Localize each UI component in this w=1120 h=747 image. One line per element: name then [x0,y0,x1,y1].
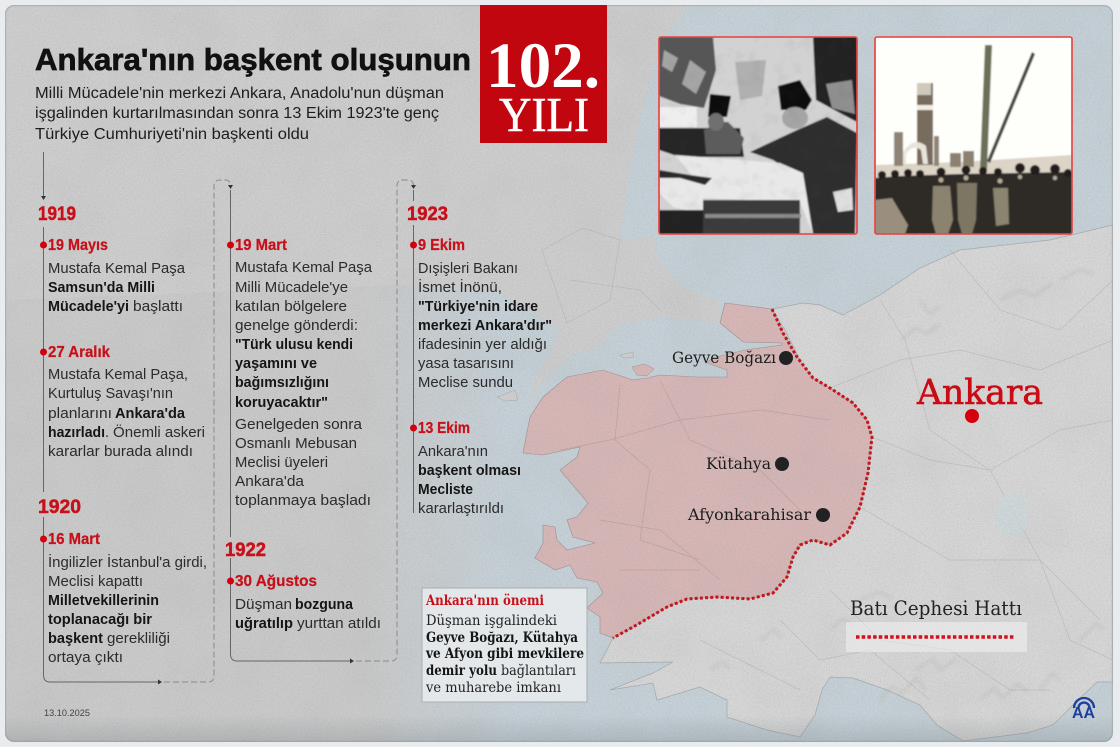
year 1920: 1920 [38,496,81,518]
callout: Ankara'nın önemi: Ankara'nın önemi [425,593,544,609]
intro text: Türkiye Cumhuriyeti'nin başkenti oldu [35,126,309,143]
timeline connector 2 [230,180,416,664]
badge: 102. yılı: YILI [499,87,589,142]
event: 27 Aralık: planlarını [48,406,112,422]
timeline connector 1 [41,152,233,684]
callout: Ankara'nın önemi: ve muharebe imkanı [425,680,561,696]
event: 19 Mart: "Türk ulusu kendi [235,337,353,353]
event: 19 Mayıs: Samsun'da Milli [48,280,155,296]
city: Geyve Boğazı: Geyve Boğazı [672,348,776,367]
event: 13 Ekim: başkent olması [418,463,521,479]
land: Balkans and Thrace [477,6,720,402]
event: 13 Ekim: Mecliste [418,482,473,498]
land: Aegean islands [497,352,634,401]
crowd heads [878,163,1072,179]
event: 19 Mart: 19 Mart [235,237,287,254]
event: 16 Mart 1920: İngilizler İstanbul'a girdi, [48,553,207,571]
badge: 102. yılı [480,5,607,143]
event: 27 Aralık [40,344,205,460]
event: 13 Ekim: 13 Ekim [418,420,470,437]
date stamp: 13.10.2025 [44,708,90,719]
event: 9 Ekim: 9 Ekim [418,237,465,254]
event: 9 Ekim: Meclise sundu [418,375,513,391]
event: 13 Ekim: Ankara'nın [418,444,488,460]
occupied region inner lines [560,380,830,580]
callout: Ankara'nın önemi: Düşman işgalindeki [426,613,557,629]
lake [1004,496,1024,530]
occupied region [523,303,872,638]
event: 9 Ekim: "Türkiye'nin idare [418,299,538,315]
callout: Ankara'nın önemi: demir yolu [426,663,497,679]
intro text [35,85,444,143]
event: 19 Mayıs [40,237,186,315]
event: 19 Mart: Genelgeden sonra [235,417,363,433]
callout: Ankara'nın önemi: Geyve Boğazı, Kütahya [426,630,578,646]
legend: Batı Cephesi Hattı: Batı Cephesi Hattı [850,596,1022,620]
event: 19 Mart: Meclisi üyeleri [235,455,328,471]
event: 16 Mart 1920: başkent [48,631,103,647]
event: 27 Aralık: Kurtuluş Savaşı'nın [48,386,173,402]
event: 16 Mart 1920 [40,531,207,666]
event: 19 Mart: genelge gönderdi: [235,318,358,334]
photo: Atatürk at the table [659,37,857,234]
event: 9 Ekim: yasa tasarısını [418,356,514,372]
event: 19 Mart: bağımsızlığını [235,375,329,391]
event: 19 Mart [227,237,373,509]
event: 16 Mart 1920: toplanacağı bir [48,612,152,628]
title: Ankara'nın başkent oluşunun [35,42,471,77]
event: 30 Ağustos: 30 Ağustos [235,573,317,590]
city: Ankara: Ankara [916,373,1043,413]
year 1919: 1919 [38,203,76,225]
photo: crowd and minarets [875,37,1072,234]
event: 16 Mart 1920: ortaya çıktı [48,650,123,666]
event: 27 Aralık: Ankara'da [115,406,186,422]
event: 30 Ağustos: uğratılıp [235,616,293,632]
event: 9 Ekim: İsmet İnönü, [418,278,502,296]
event: 19 Mayıs: başlattı [133,299,183,315]
event: 19 Mart: Osmanlı Mebusan [235,436,357,452]
city: Afyonkarahisar: Afyonkarahisar [687,505,811,524]
city: Kütahya: Kütahya [706,454,771,473]
event: 27 Aralık: 27 Aralık [48,344,110,361]
event: 19 Mart: koruyacaktır" [235,395,328,411]
icon: AA logo [1072,698,1095,722]
event: 19 Mayıs: Mustafa Kemal Paşa [48,261,186,277]
event: 9 Ekim [410,237,552,391]
event: 27 Aralık: Önemli askeri [113,423,205,441]
event: 19 Mayıs: Mücadele'yi [48,299,129,315]
event: 9 Ekim: Dışişleri Bakanı [418,261,518,277]
event: 19 Mart: yaşamını ve [235,356,317,372]
event: 30 Ağustos: yurttan atıldı [297,616,381,632]
event: 30 Ağustos: bozguna [295,597,354,613]
event: 16 Mart 1920: Milletvekillerinin [48,593,159,609]
event: 19 Mart: katılan bölgelere [235,299,347,315]
icon: AA logo: AA [1072,705,1095,722]
event: 19 Mayıs: 19 Mayıs [48,237,108,254]
callout: Ankara'nın önemi: ve Afyon gibi mevkilere [425,646,584,662]
map: relief shading [710,270,1104,700]
Kapıdağ peninsula [632,364,654,376]
event: 30 Ağustos: Düşman [235,597,292,613]
event: 30 Ağustos [227,573,381,632]
intro text: Milli Mücadele'nin merkezi Ankara, Anadolu'nun düşman [35,85,444,102]
event: 19 Mart: Milli Mücadele'ye [235,280,348,296]
event: 16 Mart 1920: Meclisi kapattı [48,574,143,590]
land: Anatolia [600,225,1113,741]
event: 27 Aralık: kararlar burada alındı [48,444,193,460]
event: 27 Aralık: Mustafa Kemal Paşa, [48,367,188,383]
event: 9 Ekim: ifadesinin yer aldığı [418,337,547,353]
intro text: işgalinden kurtarılmasından sonra 13 Ekim 1923'te genç [35,105,439,122]
event: 13 Ekim: kararlaştırıldı [418,501,504,517]
timeline connector 3 [412,190,414,513]
event: 27 Aralık: . [105,425,109,441]
badge: 102. yılı: 102. [486,30,600,102]
event: 19 Mart: Ankara'da [235,474,305,490]
legend: Batı Cephesi Hattı [846,596,1027,652]
event: 16 Mart 1920: 16 Mart [48,531,100,548]
map: terrain lines [542,228,1113,700]
event: 9 Ekim: merkezi Ankara'dır" [418,318,552,334]
callout: Ankara'nın önemi: bağlantıları [501,663,576,679]
event: 13 Ekim [410,420,521,517]
front line: Batı Cephesi [613,309,872,638]
event: 19 Mart: toplanmaya başladı [235,493,371,509]
event: 16 Mart 1920: gerekliliği [107,631,170,647]
callout: Ankara'nın önemi [422,588,587,702]
event: 27 Aralık: hazırladı [48,425,105,441]
year 1922: 1922 [225,539,266,561]
event: 19 Mart: Mustafa Kemal Paşa [235,260,373,276]
year 1923: 1923 [407,203,448,225]
